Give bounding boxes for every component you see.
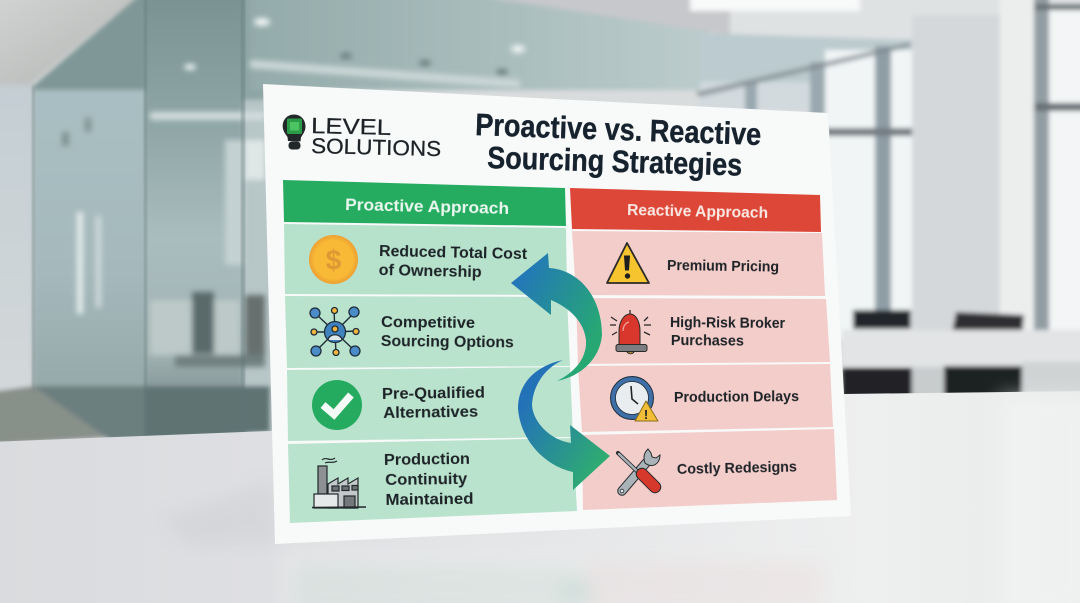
icon: wrench and screwdriver xyxy=(618,449,660,493)
table top xyxy=(0,391,1080,603)
proactive header xyxy=(283,180,566,226)
proactive row: production continuity: Continuity xyxy=(385,471,467,489)
proactive row: production continuity: Production xyxy=(384,451,470,469)
proactive row: reduced total cost: Reduced Total Cost xyxy=(379,243,528,263)
reactive row: costly redesigns xyxy=(582,429,837,510)
arrow: proactive to reactive (down) xyxy=(518,360,610,490)
proactive row: pre-qualified: Alternatives xyxy=(383,404,478,422)
panel: proactive approach xyxy=(283,180,577,523)
reactive header xyxy=(570,188,821,232)
logo wordmark: LEVEL xyxy=(311,113,391,140)
reactive row: production delays: Production Delays xyxy=(674,388,799,406)
title: Sourcing Strategies xyxy=(487,140,743,183)
logo wordmark: SOLUTIONS xyxy=(311,134,441,161)
proactive row: competitive sourcing xyxy=(285,296,570,368)
proactive row: reduced total cost: of Ownership xyxy=(379,262,482,281)
reactive row: high-risk broker: High-Risk Broker xyxy=(670,314,785,332)
proactive row: reduced total cost xyxy=(284,224,567,295)
proactive row: pre-qualified: Pre-Qualified xyxy=(382,385,485,403)
logo wordmark xyxy=(311,113,441,161)
icon: network hub xyxy=(310,307,360,356)
proactive row: production continuity xyxy=(288,438,577,523)
proactive row: production continuity: Maintained xyxy=(385,491,474,509)
icon: green check xyxy=(312,380,362,430)
arrow: reactive to proactive (up) xyxy=(511,253,602,381)
reactive row: high-risk broker xyxy=(576,298,830,364)
reactive row: premium pricing xyxy=(572,231,825,296)
title: Proactive vs. Reactive xyxy=(475,107,762,152)
card: infographic poster xyxy=(263,84,851,544)
reactive row: premium pricing: Premium Pricing xyxy=(667,257,779,276)
icon: dollar coin xyxy=(309,235,358,284)
proactive row: competitive sourcing: Sourcing Options xyxy=(381,333,514,351)
icon: factory xyxy=(312,458,366,508)
proactive row: pre-qualified xyxy=(287,367,573,441)
reactive row: costly redesigns: Costly Redesigns xyxy=(677,458,797,478)
icon: circuit light bulb xyxy=(283,114,306,150)
logo: Level Solutions xyxy=(283,113,441,161)
panel: reactive approach xyxy=(570,188,837,510)
title xyxy=(475,107,762,183)
icon: warning triangle xyxy=(607,243,649,283)
icon: clock with warning xyxy=(610,376,658,422)
icon: dollar coin: $ xyxy=(326,244,342,276)
reactive row: production delays xyxy=(578,364,833,432)
reactive row: high-risk broker: Purchases xyxy=(671,332,744,350)
icon: clock with warning: ! xyxy=(644,407,648,422)
proactive header: Proactive Approach xyxy=(345,196,509,218)
icon: alarm bell xyxy=(610,310,651,354)
proactive row: competitive sourcing: Competitive xyxy=(381,314,475,332)
card reflection xyxy=(278,548,848,603)
reactive header: Reactive Approach xyxy=(627,202,768,222)
